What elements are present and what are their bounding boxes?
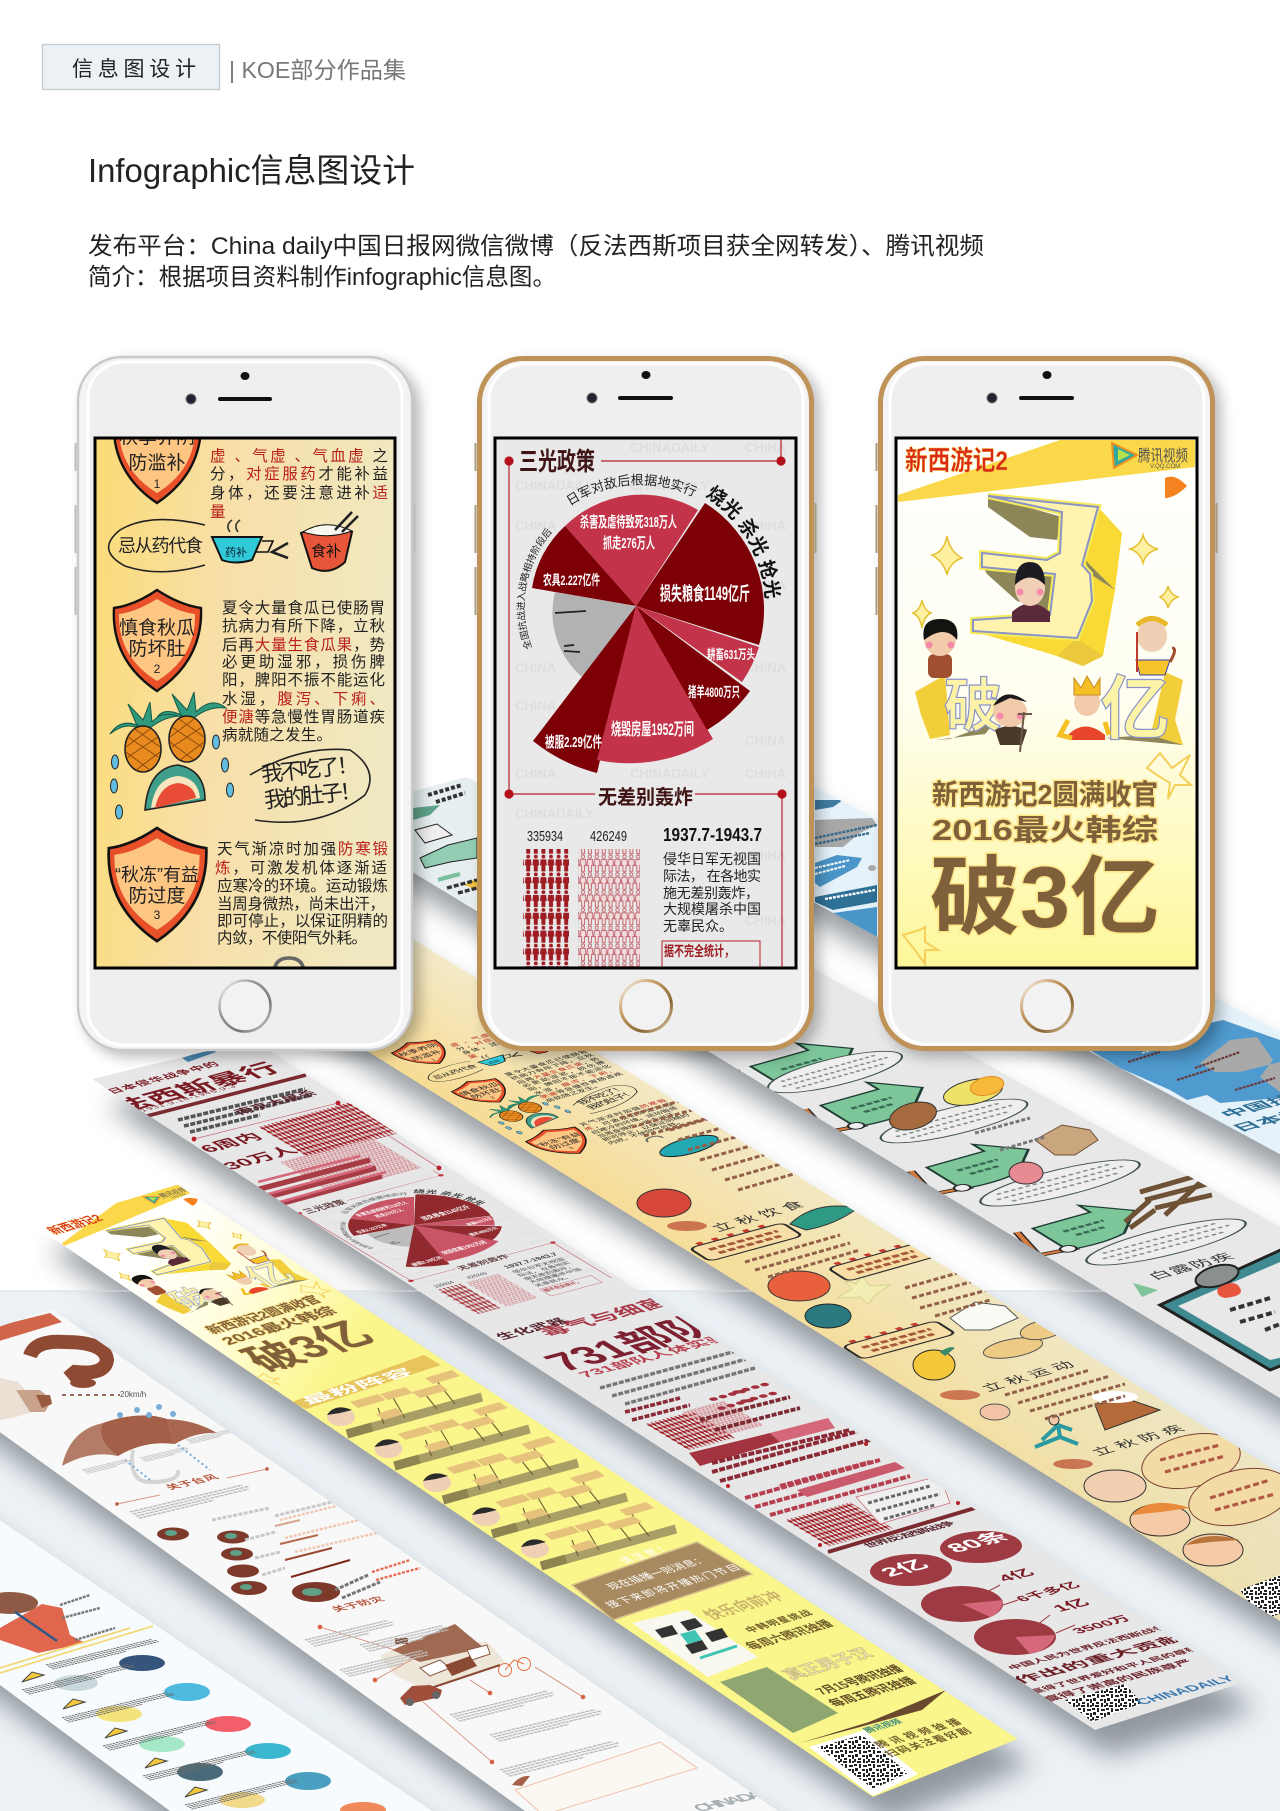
phone 2: screen border (495, 438, 796, 968)
phone 3: body (880, 358, 1212, 1048)
Tencent video logo: 腾讯视频 (1138, 447, 1188, 465)
title line 2: 2016最火韩综 (932, 814, 1158, 847)
yellow strip: show two photo (720, 1667, 838, 1733)
strip: autumn health hand-drawn infographic (368, 939, 1280, 1621)
pie labels: 损失粮食1149亿斤 (660, 582, 750, 605)
paragraph 2: 便溏等急慢性胃肠道疾 (222, 708, 385, 726)
speech ellipse 忌从药代食: 忌从药代食 (118, 536, 203, 556)
typhoon strip: small umbrella icon (512, 1776, 530, 1786)
big 3: shaded side (1057, 638, 1103, 666)
phone 1: silver (76, 357, 414, 1050)
curved caption: 全国抗战进入战略相持阶段后: 全国抗战进入战略相持阶段后 (516, 528, 552, 650)
typhoon strip: umbrella captions (82, 1429, 238, 1473)
watermark CHINADAILY: CHINA (745, 578, 787, 593)
speech bubble: stomach complaint: 我不吃了！ (260, 752, 360, 787)
top paragraph: 量 (210, 504, 226, 521)
autumn strip: QR code (1240, 1575, 1280, 1620)
phone 1: screen background (94, 437, 396, 969)
red strip: red cluster (708, 1382, 779, 1410)
phone 2: screen background (494, 437, 797, 969)
tips strip: tip text lines (22, 1639, 300, 1809)
phone shadows (84, 362, 1221, 1057)
top yellow band (898, 440, 1195, 502)
red strip: QR code (1065, 1684, 1142, 1722)
autumn strip: faces and scroll bubbles (1084, 1425, 1280, 1566)
description block (88, 233, 984, 291)
tips strip: warning triangles (22, 1672, 207, 1797)
pie labels (543, 513, 755, 751)
red strip: stat pies: 4亿 (994, 1567, 1039, 1584)
bombing paragraph: 施无差别轰炸， (663, 885, 759, 901)
watermark CHINADAILY (515, 440, 787, 928)
Tencent video logo: V.QQ.COM (1150, 464, 1180, 470)
bowl: 食补: 食补 (311, 543, 341, 560)
red strip: closing statement: 作出的重大贡献 (1009, 1633, 1189, 1686)
red strip: frame and dots (192, 1101, 441, 1170)
Tencent video logo (1112, 443, 1188, 470)
strip shadows (0, 800, 1280, 1811)
autumn strip: hand-written paragraphs (620, 1084, 1125, 1419)
yellow strip: show one title: 快乐向前冲 (699, 1589, 788, 1622)
yellow strip: show one poster (632, 1610, 758, 1677)
red strip: casualty blocks (625, 1398, 764, 1450)
red strip: closing statement: 赢得了崇高的民族尊严 (1039, 1658, 1196, 1703)
red strip: stat pies: 3500万 (1069, 1614, 1134, 1636)
sparkle stars (913, 535, 1178, 628)
red strip: Nanjing section (196, 1088, 421, 1206)
red strip: statistics (689, 1397, 960, 1547)
cup: 药补 (212, 520, 273, 562)
red strip: title: 法西斯暴行 (105, 1059, 286, 1116)
blue strip: heading (1221, 1095, 1280, 1132)
top paragraph: 身体，还要注意进补适 (210, 483, 388, 502)
shield 3 text: “秋冻”有益 (115, 865, 199, 885)
top paragraph (210, 447, 388, 521)
description block: 简介：根据项目资料制作infographic信息图。 (88, 264, 556, 291)
phone 3: face (890, 364, 1204, 1044)
red strip: stat circles (869, 1529, 1023, 1587)
red strip: stat circles: 2亿 (875, 1557, 934, 1579)
pie labels: 抓走276万人 (603, 535, 655, 552)
typhoon strip: wind speed label: 20km/h (120, 1390, 146, 1399)
yellow strip: cast rows (327, 1370, 676, 1566)
strip: typhoon infographic (0, 1309, 800, 1811)
number 426249: 426249 (590, 828, 627, 845)
yellow strip: footer text: 扫码关注看好剧 (881, 1726, 975, 1759)
shield 3 text: 防过度 (128, 885, 186, 907)
shield 1 text: 秋季养阴 (119, 426, 195, 448)
watermark CHINADAILY: CHINADAILY (515, 478, 594, 493)
watermark CHINADAILY: CHINA (745, 440, 787, 455)
watermark CHINADAILY: CHINA (745, 848, 787, 863)
people grid: deaths (523, 849, 569, 969)
phone 3: screen background (895, 437, 1198, 969)
bombing paragraph (663, 851, 761, 934)
autumn strip: heading blobs (667, 1221, 1093, 1469)
strip: grey herbs hand-drawn infographic (413, 777, 1280, 1398)
big 3: side face (973, 507, 1122, 666)
spark top right (1147, 753, 1191, 799)
red strip: closing statement: 赢得了世界爱好和平人民的尊敬 (1027, 1645, 1203, 1695)
phone 1: home button (220, 980, 270, 1032)
yellow strip: footer text: 腾讯视频 (860, 1717, 905, 1734)
red strip: closing statement: 中国人民为世界反法西斯战争 (1005, 1623, 1171, 1671)
heading 三光政策: 三光政策 (519, 448, 595, 476)
description block: 发布平台：China daily中国日报网微信微博（反法西斯项目获全网转发）、腾讯视频 (88, 233, 984, 260)
watermark CHINADAILY: CHINA (515, 766, 557, 781)
yellow strip: QR code (809, 1730, 918, 1796)
watermark CHINADAILY: CHINA (745, 733, 787, 748)
block 亿: 亿 (1100, 670, 1170, 748)
red strip: stat circles: 80条 (941, 1529, 1014, 1555)
bombing paragraph: 际法， 在各地实 (663, 868, 761, 884)
blue strip: section between phones (815, 800, 877, 937)
tips strip: tip illustrations (54, 1655, 386, 1811)
watermark CHINADAILY: CHINADAILY (515, 806, 594, 821)
watermark CHINADAILY: CHINA (745, 913, 787, 928)
paragraph 2: 阳，脾阳不振不能运化 (222, 671, 385, 689)
paragraph 3 (215, 839, 388, 947)
red strip: stat pies (921, 1567, 1134, 1655)
red strip: CHINA DAILY tag (182, 1051, 216, 1062)
big 3: glow (973, 496, 1098, 638)
show logo 新西游记2: 新西游记2 (905, 446, 1008, 476)
yellow strip: section band: 最粉阵容 (297, 1365, 418, 1407)
header subtitle: | KOE部分作品集 (229, 57, 406, 83)
autumn strip: note cards (685, 1220, 956, 1359)
pie labels: 被服2.29亿件 (545, 734, 602, 751)
speech bubble: stomach complaint: 我的肚子！ (263, 778, 363, 813)
watermark CHINADAILY: CHINA (515, 698, 557, 713)
blue strip: map text (1128, 1051, 1276, 1091)
phone 2: gold (474, 356, 816, 1051)
strip: safety tips infographic (0, 1453, 450, 1811)
phone 3: screen artwork (898, 440, 1195, 964)
heading 无差别轰炸: 无差别轰炸 (598, 785, 693, 809)
phone 2: speaker dot (642, 371, 650, 379)
red strip: divider (828, 1508, 975, 1552)
pie labels: 烧毁房屋1952万间 (611, 720, 694, 739)
paragraph 2: 夏令大量食瓜已使肠胃 (222, 599, 385, 617)
shield 3 text (115, 865, 199, 922)
paragraph 3: 应寒冷的环境。运动锻炼 (217, 876, 388, 895)
shield 2 text: 2 (154, 662, 161, 676)
strip: variety show yellow infographic (35, 1183, 1018, 1797)
typhoon strip: prevention paragraphs (305, 1620, 625, 1776)
paragraph 2 (222, 599, 385, 744)
title line 3 破3亿: 破3亿 (930, 850, 1160, 946)
less-than symbol (272, 543, 288, 558)
phone 2: side buttons (476, 443, 816, 615)
shield 3 text: 3 (154, 908, 161, 922)
typhoon strip: rain drops (117, 1404, 176, 1418)
watermark CHINADAILY: CHINADAILY (630, 440, 709, 455)
red strip: closing statement (1005, 1623, 1203, 1703)
shield 2 text: 慎食秋瓜 (119, 617, 195, 639)
paragraph 3: 当周身微热，尚未出汗， (217, 895, 385, 913)
typhoon strip: heading 关于防灾: 关于防灾 (328, 1595, 388, 1614)
yellow strip: show two title: 7月15号腾讯独播 (811, 1663, 907, 1697)
water drops (110, 735, 234, 819)
grey strip: top area between phones (413, 777, 477, 913)
typhoon strip: paragraph (130, 1484, 255, 1518)
paragraph 3: 内敛，不使阳气外耗。 (217, 929, 367, 947)
red strip: Nanjing section: 30万人 (219, 1144, 303, 1172)
yellow strip: brown notice board: 现在插播一则消息： (603, 1554, 711, 1592)
grey strip: triangle icon (1133, 1283, 1158, 1297)
title line 1: 新西游记2圆满收官 (932, 779, 1158, 810)
yellow strip: footer text: 腾讯视频独播 (871, 1717, 965, 1750)
header tag: 信息图设计 (42, 44, 220, 90)
background: pale blue floor (0, 1291, 1280, 1811)
bombing paragraph: 侵华日军无视国 (663, 851, 761, 867)
yellow strip: show two title: 每周五腾讯独播 (824, 1675, 920, 1709)
red strip: biochemical section: 毒气与细菌实验 (534, 1282, 724, 1339)
watermark CHINADAILY: CHINA (515, 518, 557, 533)
bowl: 食补 (301, 512, 358, 571)
paragraph 3: 天气渐凉时加强防寒锻 (217, 839, 388, 858)
autumn strip: fruit and food icons (637, 1131, 1160, 1447)
shield 1 text: 1 (154, 477, 161, 491)
red strip: stat pies: 1亿 (1049, 1597, 1094, 1614)
typhoon strip: map (0, 1378, 120, 1420)
typhoon strip: house scene (380, 1624, 530, 1706)
shield 3 (109, 828, 206, 941)
callout box (662, 941, 760, 975)
phone 3: earpiece (1019, 396, 1074, 400)
typhoon strip: wind level circles (157, 1528, 340, 1602)
yellow strip: show one title: 每周六腾讯独播 (741, 1618, 837, 1652)
yellow strip: mapped artwork from the phone (38, 1183, 410, 1388)
watermark CHINADAILY: CHINA (745, 766, 787, 781)
phone 3: side buttons (876, 443, 1216, 615)
cast figure: left (923, 619, 957, 678)
phone 1: camera (186, 394, 196, 404)
title: Infographic信息图设计 (88, 152, 415, 189)
phone 3: speaker dot (1042, 371, 1052, 379)
tips strip: level figure (0, 1592, 115, 1653)
autumn strip: heading 立秋防疾: 立秋防疾 (1088, 1423, 1188, 1458)
phone 3: screen border (896, 438, 1197, 968)
spark bottom left (903, 927, 938, 964)
shield 2 text: 防坏肚 (128, 638, 186, 660)
phone 2: camera (587, 393, 597, 403)
callout box: 据不完全统计， (664, 943, 734, 959)
header tag: 信息图设计: 信息图设计 (72, 58, 196, 81)
phone 1: speaker dot (240, 372, 250, 380)
phone 3: camera (987, 393, 997, 403)
block 破 (915, 674, 1002, 740)
frame dots (504, 456, 787, 799)
phone 1: screen border (95, 438, 395, 968)
phone 1: body (78, 357, 412, 1050)
red strip: Nanjing section: 南京大屠杀 (231, 1088, 320, 1116)
tips strip: gold rules (0, 1626, 153, 1673)
red strip: heading 世界反法西斯战争: 世界反法西斯战争 (860, 1519, 959, 1549)
big 3: front face (973, 496, 1098, 638)
typhoon strip: heading 关于台风: 关于台风 (162, 1473, 222, 1492)
phone 2: body (480, 358, 812, 1048)
phone 2: screen artwork (504, 440, 787, 966)
phone 3: gold (876, 358, 1216, 1048)
background: white upper wall (0, 0, 1280, 1291)
cast figure: pig (993, 694, 1032, 752)
paragraph 2: 后再大量生食瓜果，势 (222, 636, 385, 654)
watermelon (145, 765, 205, 810)
shield 2 text (119, 617, 195, 676)
paragraph 2: 必更助湿邪，损伤脾 (222, 653, 385, 671)
yellow strip: brown notice board: 请注意！ (615, 1543, 675, 1566)
shield 1 (114, 402, 201, 503)
typhoon strip: wind level bars (212, 1500, 420, 1598)
pie labels: 杀害及虐待致死318万人 (580, 513, 677, 531)
big 3: olive returns (982, 496, 1115, 611)
red strip: title bar (147, 1075, 306, 1116)
shield 1 text: 防滥补 (128, 452, 186, 474)
cup: 药补: 药补 (225, 546, 247, 559)
frame lines (509, 437, 782, 969)
speech ellipse 忌从药代食 (109, 520, 205, 572)
red strip: date: 1931.9.18-1945.9.3 (137, 1083, 238, 1113)
pie labels: 猪羊4800万只 (688, 684, 740, 700)
shield 1 text (119, 426, 195, 491)
paragraph 2: 病就随之发生。 (222, 726, 332, 744)
strip: anti-fascist war infographic (92, 1040, 1242, 1730)
strip: blue map infographic (814, 787, 1280, 1154)
cast figure: monkey (1136, 618, 1175, 675)
block 破: 破 (944, 674, 1002, 739)
pie chart (532, 495, 764, 773)
paragraph 2: 抗病力有所下降，立秋 (222, 617, 385, 635)
paragraph 3: 炼，可激发机体逐渐适 (215, 859, 387, 877)
people grid: injured (578, 849, 640, 969)
red strip: intro paragraph (178, 1089, 312, 1132)
red strip: title: 日本侵华战争中的 (104, 1060, 223, 1095)
red strip: stat pies: 6千多亿 (1012, 1580, 1084, 1604)
autumn strip: mapped artwork from the phone (390, 1034, 690, 1154)
date heading: 1937.7-1943.7 (663, 825, 762, 845)
blue strip: sea (1090, 1020, 1280, 1103)
typhoon strip: tips box (515, 1742, 697, 1811)
red strip: biochemical section: 生化武器 (492, 1316, 571, 1342)
typhoon strip: header ribbon (0, 1313, 62, 1342)
phone 2: home button (620, 980, 672, 1032)
red strip: biochemical section: 731部队 (534, 1311, 729, 1377)
yellow strip: brown notice board (572, 1542, 752, 1620)
watermark CHINADAILY: CHINADAILY (630, 766, 709, 781)
grey strip: herb arrows (738, 1042, 1136, 1256)
grey strip: clipboard (1160, 1248, 1280, 1370)
yellow strip: show one title: 中韩明星挑战 (742, 1608, 816, 1635)
yellow strip: wedge line (800, 1690, 946, 1743)
typhoon strip: umbrella (62, 1415, 217, 1482)
phone 2: earpiece (618, 396, 673, 400)
paragraph 2: 水湿，腹泻、下痢、 (222, 690, 385, 708)
pie labels: 耕畜631万头 (707, 647, 755, 662)
clipboard ring peek (274, 958, 304, 972)
watermark CHINADAILY: CHINA (515, 660, 557, 675)
phone 3: home button (1022, 980, 1072, 1032)
red strip: Nanjing section: 6周内 (196, 1131, 267, 1155)
grey strip: heading 白露防疾: 白露防疾 (1145, 1251, 1238, 1282)
phone 1: side buttons (76, 443, 414, 615)
yellow strip: show one title (699, 1589, 837, 1652)
top paragraph: 分，对症服药才能补益 (210, 465, 388, 483)
typhoon strip: heading rules (115, 1467, 269, 1506)
autumn strip: heading 立秋运动: 立秋运动 (978, 1359, 1078, 1394)
cast figure: centre (1012, 562, 1050, 622)
yellow strip: footer text (860, 1717, 975, 1759)
yellow strip: show two title: 真正男子汉 (778, 1645, 878, 1682)
pineapples (110, 692, 226, 772)
phone 1: face (88, 362, 402, 1045)
yellow strip: section band (292, 1355, 441, 1409)
red strip: China Daily logo: CHINADAILY (1133, 1674, 1239, 1707)
curved caption: 日军对敌后根据地实行: 日军对敌后根据地实行 (566, 474, 698, 506)
yellow strip: show two title (778, 1645, 920, 1709)
paragraph 3: 即可停止，以保证阴精的 (217, 912, 388, 930)
yellow strip: brown notice board: 接下来即将开播热门节目 (602, 1562, 744, 1610)
curved caption: 烧光 杀光 抢光: 烧光 杀光 抢光 (706, 484, 782, 598)
shield 2 (114, 590, 201, 691)
red strip: biochemical section (496, 1298, 756, 1406)
phone 1: earpiece (218, 397, 272, 401)
number 335934: 335934 (527, 828, 563, 845)
pie labels: 农具2.227亿件 (543, 572, 600, 588)
grey strip: fruit and herbs (886, 1074, 1215, 1228)
watermark CHINADAILY: CHINA (745, 660, 787, 675)
horizon line (0, 1290, 1280, 1292)
phone 2: face (489, 364, 803, 1044)
grey strip: speech bubbles (767, 1050, 1247, 1266)
red strip: biochemical section: 731部队人体实验 (574, 1332, 733, 1380)
speech bubble: stomach complaint (250, 749, 370, 822)
blue strip: land (1200, 1037, 1280, 1092)
red strip: pie chart section mapped from the phone (289, 1170, 616, 1318)
typhoon strip: leader lines (318, 1625, 585, 1764)
watermark CHINADAILY: CHINADAILY (630, 478, 709, 493)
bombing paragraph: 大规模屠杀中国 (663, 901, 761, 917)
orange badge (1165, 477, 1187, 498)
phone 1: screen artwork (109, 402, 388, 972)
cast figure: monk (1060, 676, 1109, 740)
watermark CHINADAILY: CHINA (745, 518, 787, 533)
bombing paragraph: 无辜民众。 (663, 918, 733, 934)
typhoon strip: question mark (30, 1342, 107, 1388)
top paragraph: 虚 、气虚 、气血虚 之 (210, 447, 388, 465)
autumn strip: heading 立秋饮食: 立秋饮食 (708, 1199, 808, 1234)
